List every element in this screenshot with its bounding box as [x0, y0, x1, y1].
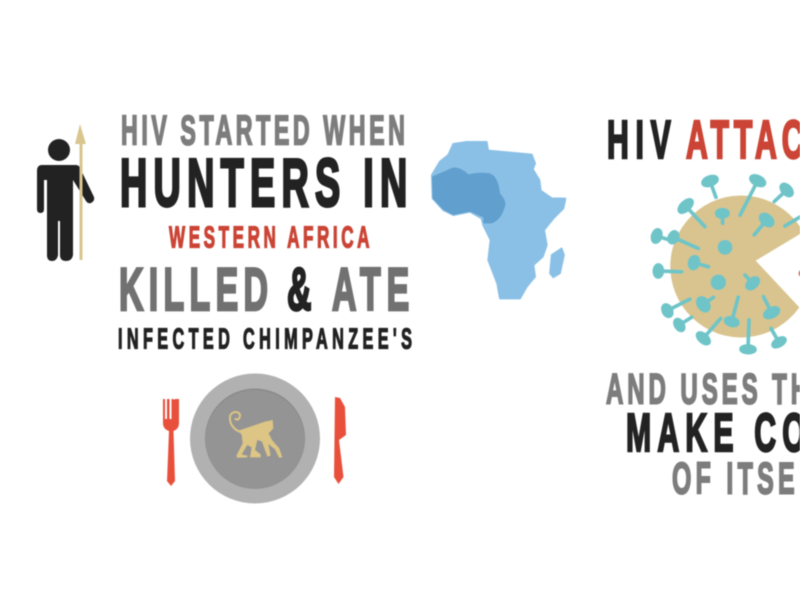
- heading: hiv started when hunters in western africa: WESTERN AFRICA: [169, 222, 370, 255]
- map: africa with western africa highlighted: [432, 142, 565, 298]
- heading: hiv started when hunters in western africa: &: [287, 257, 311, 324]
- heading: hiv started when hunters in western africa: ATE: [332, 257, 409, 324]
- icon: monkey: [230, 412, 282, 458]
- heading: hiv started when hunters in western africa: HUNTERS IN: [120, 144, 407, 221]
- heading: hiv started when hunters in western africa: KILLED: [119, 257, 268, 324]
- icon: virus pac-man attacking a cell: [651, 174, 800, 353]
- text: and uses the, make copies, of itself: OF ITSE: [672, 453, 795, 503]
- text: and uses the, make copies, of itself: [606, 365, 800, 503]
- heading: hiv started when hunters in western africa: INFECTED CHIMPANZEE'S: [118, 323, 412, 355]
- heading: hiv attacks: [607, 110, 800, 170]
- heading: hiv started when hunters in western africa: HIV STARTED WHEN: [121, 109, 405, 154]
- icon: hunter with spear: [37, 124, 94, 261]
- icon: plate with monkey, fork and knife: [163, 374, 346, 504]
- icon: fork: [163, 399, 179, 486]
- heading: hiv started when hunters in western africa: [118, 109, 412, 355]
- heading: hiv attacks: HIV: [607, 110, 671, 170]
- icon: knife: [334, 397, 346, 484]
